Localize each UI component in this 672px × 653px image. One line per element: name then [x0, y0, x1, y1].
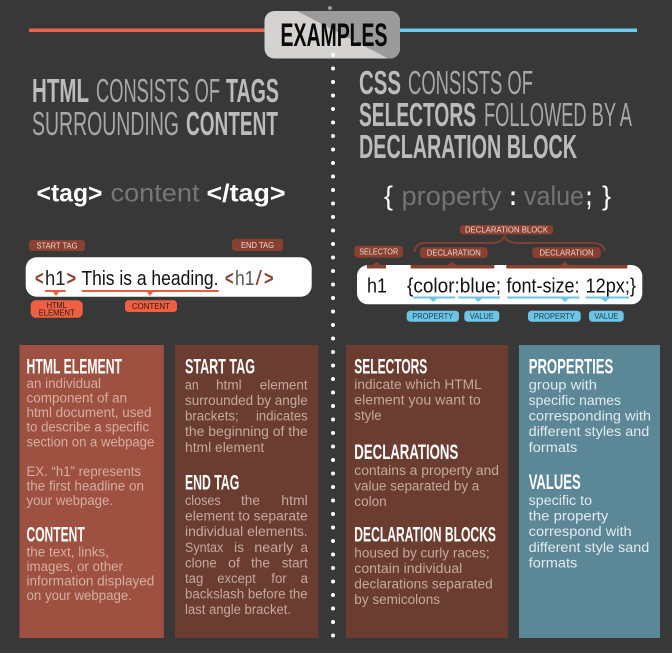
- label: property 2: PROPERTY: [534, 312, 575, 321]
- title badge: [264, 6, 400, 58]
- title badge: EXAMPLES: [280, 17, 388, 53]
- label: end tag: END TAG: [241, 241, 274, 250]
- code box: html: <: [225, 268, 234, 290]
- heading: HTML: SURROUNDING: [32, 105, 179, 142]
- code box: css: 12px;}: [586, 275, 636, 297]
- syntax: html tag: content: [110, 180, 200, 208]
- panel: selectors and declarations: [346, 345, 508, 638]
- panel: start tag and end tag: END TAG: [185, 471, 239, 494]
- syntax: html tag: [36, 180, 286, 208]
- header rule: red: [29, 28, 265, 32]
- panel: start tag and end tag: start: [282, 555, 308, 570]
- panel: selectors and declarations: colon: [354, 494, 387, 509]
- panel: start tag and end tag: last angle bracket.: [185, 602, 291, 617]
- heading: CSS: CSS: [359, 64, 401, 101]
- panel: selectors and declarations: indicate which HTML: [354, 377, 482, 392]
- panel: selectors and declarations: DECLARATION BLOCKS: [354, 524, 496, 547]
- panel: start tag and end tag: is: [234, 540, 244, 555]
- code box: html: /: [256, 268, 263, 290]
- heading: HTML: CONTENT: [186, 105, 278, 142]
- label: property 2: [528, 311, 581, 322]
- code box: css: h1: [367, 275, 387, 297]
- code box: html: This is a heading.: [82, 268, 218, 290]
- panel: start tag and end tag: html: [216, 377, 242, 392]
- panel: start tag and end tag: surrounded by angle: [185, 393, 308, 408]
- panel: html element and content: to describe a specific: [26, 420, 149, 435]
- code box: css: {color:blue;: [407, 275, 501, 297]
- heading: CSS: SELECTORS: [359, 96, 476, 133]
- syntax: css rule: :: [510, 181, 516, 211]
- heading: HTML: [32, 72, 279, 142]
- panel: start tag and end tag: indicates: [256, 409, 308, 424]
- panel: start tag and end tag: backslash before the: [185, 587, 308, 602]
- label: value 2: [589, 311, 624, 322]
- panel: html element and content: the first headline on: [26, 478, 144, 494]
- html example diagram: [26, 239, 312, 318]
- panel: html element and content: the text, links,: [26, 545, 109, 560]
- panel: properties and values: different style sand: [529, 540, 649, 555]
- panel: start tag and end tag: except: [217, 571, 256, 586]
- marker: html element: [45, 290, 66, 296]
- markers: property and value: [413, 296, 629, 302]
- label: html element: HTML: [47, 301, 67, 310]
- panel: html element and content: [20, 345, 164, 638]
- label: value 2: VALUE: [594, 312, 618, 321]
- panel: selectors and declarations: value separated by a: [354, 479, 480, 494]
- header rule: blue: [400, 28, 637, 32]
- code box: html: >: [66, 268, 76, 290]
- panel: selectors and declarations: contain individual: [354, 561, 462, 576]
- code box: html: h1: [45, 268, 66, 290]
- code box: html: [26, 257, 312, 297]
- label: start tag: START TAG: [36, 242, 78, 250]
- panel: properties and values: correspond with: [529, 524, 632, 539]
- label: content: [125, 300, 177, 312]
- panel: properties and values: VALUES: [529, 471, 581, 494]
- heading: CSS: [359, 64, 632, 165]
- panel: start tag and end tag: tag: [185, 571, 203, 586]
- syntax: css rule: }: [602, 181, 611, 211]
- panel: html element and content: html document, used: [26, 405, 152, 420]
- label: html element: [31, 300, 83, 318]
- label: declaration block: DECLARATION BLOCK: [465, 226, 549, 235]
- label: property 1: [407, 311, 459, 322]
- panel: start tag and end tag: [175, 345, 318, 638]
- panel: start tag and end tag: closes: [185, 493, 221, 508]
- panel: html element and content: on your webpage.: [26, 588, 132, 603]
- panel: html element and content: section on a webpage: [26, 434, 154, 449]
- panel: selectors and declarations: DECLARATIONS: [354, 441, 458, 464]
- code box: html: h1: [235, 268, 254, 290]
- panel: start tag and end tag: brackets;: [185, 409, 239, 424]
- panel: start tag and end tag: individual elements.: [185, 524, 308, 539]
- panel: html element and content: EX. “h1” represents: [26, 464, 141, 479]
- syntax: css rule: {: [384, 181, 393, 211]
- panel: start tag and end tag: html: [281, 493, 308, 508]
- panel: selectors and declarations: declarations separated: [354, 576, 493, 592]
- syntax: html tag: </tag>: [206, 180, 286, 208]
- panel: properties and values: [519, 345, 660, 638]
- heading: HTML: TAGS: [226, 72, 279, 109]
- panel: properties and values: different styles and: [529, 424, 649, 439]
- panel: properties and values: formats: [529, 555, 578, 570]
- panel: selectors and declarations: contains a property and: [354, 463, 499, 478]
- panel: start tag and end tag: the beginning of the: [185, 424, 308, 439]
- panel: start tag and end tag: a: [300, 540, 308, 555]
- label: declaration 1: DECLARATION: [427, 249, 481, 258]
- label: html element: ELEMENT: [39, 309, 75, 318]
- marker: content: [82, 290, 219, 296]
- panel: selectors and declarations: housed by curly races;: [354, 545, 490, 560]
- code box: css: font-size:: [506, 275, 580, 297]
- panel: start tag and end tag: an: [185, 377, 199, 392]
- panel: start tag and end tag: the: [251, 555, 270, 570]
- panel: html element and content: an individual: [26, 376, 101, 391]
- label: declaration 2: DECLARATION: [540, 249, 594, 258]
- panel: html element and content: component of an: [26, 391, 127, 406]
- panel: selectors and declarations: by semicolons: [354, 592, 440, 607]
- panel: properties and values: PROPERTIES: [529, 356, 613, 378]
- label: selector: SELECTOR: [359, 248, 398, 257]
- panel: start tag and end tag: element: [260, 377, 308, 392]
- label: value 1: [464, 311, 499, 322]
- code box: html: >: [264, 268, 274, 290]
- center dotted divider: [331, 66, 335, 638]
- panel: html element and content: images, or other: [26, 559, 123, 574]
- heading: CSS: CONSISTS OF: [408, 64, 533, 101]
- panel: start tag and end tag: for: [271, 571, 287, 586]
- syntax: css rule: [384, 181, 611, 211]
- label: start tag: [29, 240, 85, 251]
- brace: [414, 236, 605, 252]
- panel: html element and content: information displayed: [26, 574, 154, 588]
- panel: selectors and declarations: element you want to: [354, 393, 481, 408]
- syntax: css rule: value: [524, 181, 584, 211]
- panel: selectors and declarations: SELECTORS: [354, 356, 427, 378]
- panel: start tag and end tag: html element: [185, 440, 265, 455]
- panel: start tag and end tag: START TAG: [185, 356, 255, 378]
- panel: properties and values: corresponding with: [529, 409, 651, 424]
- label: value 1: VALUE: [470, 312, 494, 321]
- panel: properties and values: specific names: [529, 393, 621, 408]
- label: selector: [354, 246, 403, 258]
- syntax: css rule: ;: [586, 181, 592, 211]
- panel: html element and content: your webpage.: [26, 493, 113, 508]
- panel: properties and values: group with: [529, 377, 597, 392]
- panel: start tag and end tag: Syntax: [185, 540, 224, 555]
- panel: html element and content: CONTENT: [26, 524, 85, 547]
- heading: HTML: HTML: [32, 72, 89, 109]
- panel: start tag and end tag: the: [241, 493, 260, 508]
- label: end tag: [232, 239, 283, 251]
- panel: start tag and end tag: a: [300, 571, 308, 586]
- markers: selector and declarations: [367, 262, 627, 268]
- panel: start tag and end tag: clone: [185, 555, 217, 570]
- panel: html element and content: HTML ELEMENT: [26, 356, 122, 378]
- label: property 1: PROPERTY: [412, 312, 454, 321]
- panel: selectors and declarations: style: [354, 408, 382, 423]
- panel: properties and values: specific to: [529, 493, 592, 508]
- panel: start tag and end tag: element to separate: [185, 509, 308, 524]
- panel: properties and values: the property: [529, 509, 609, 524]
- label: content: CONTENT: [132, 302, 170, 311]
- label: declaration 2: [532, 247, 601, 258]
- panel: properties and values: formats: [529, 440, 578, 455]
- label: declaration 1: [420, 247, 488, 258]
- css example diagram: [354, 225, 642, 322]
- code box: css: [357, 265, 642, 304]
- panel: start tag and end tag: of: [228, 555, 240, 570]
- heading: HTML: CONSISTS OF: [96, 72, 220, 109]
- code box: html: <: [35, 268, 44, 290]
- syntax: css rule: property: [402, 181, 502, 211]
- panel: start tag and end tag: nearly: [254, 540, 294, 555]
- syntax: html tag: <tag>: [36, 180, 102, 208]
